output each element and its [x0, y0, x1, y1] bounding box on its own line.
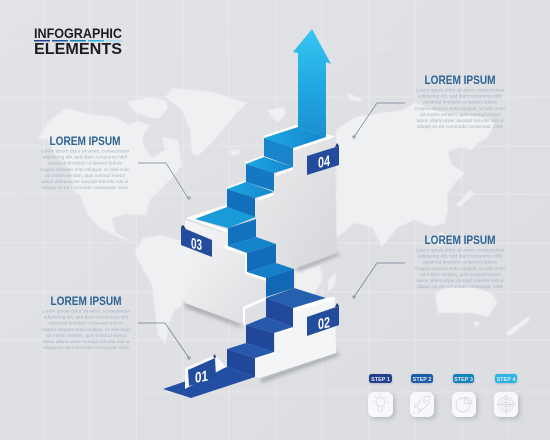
label 04 — [307, 143, 339, 175]
title — [34, 25, 122, 58]
label 01: 01 — [195, 368, 208, 387]
icon card: target — [494, 392, 518, 417]
arrow — [293, 29, 331, 137]
label 03: 03 — [191, 235, 202, 254]
label 03 — [181, 225, 212, 257]
text block: middle right — [415, 235, 505, 290]
staircase — [163, 29, 341, 398]
icon card: pie chart — [452, 392, 476, 417]
icon card: light bulb — [368, 392, 393, 417]
text block: bottom left: LOREM IPSUM — [50, 296, 122, 308]
text block: top left: ad minim veniam, quis nostrud exerci — [45, 173, 125, 179]
label 01 — [188, 354, 216, 387]
text block: bottom left: adipiscing elit, sed diam nonummy nibh — [44, 315, 129, 321]
step 1 pill: STEP 1 — [371, 377, 390, 383]
text block: bottom left — [41, 296, 131, 351]
text block: middle right: magna aliquam erat volutpat. Ut wisi enim — [415, 266, 505, 272]
text block: bottom left: tation ullamcorper suscipit lobortis nisl ut — [43, 339, 130, 345]
title: INFOGRAPHIC — [34, 25, 122, 41]
lower stairs — [266, 288, 326, 308]
leader line: bottom left — [138, 323, 190, 359]
text block: top left: LOREM IPSUM — [50, 136, 120, 148]
text block: bottom left: magna aliquam erat volutpat. Ut wisi enim — [41, 327, 131, 333]
label 04: 04 — [318, 153, 330, 172]
text block: top left: euismod tincidunt ut laoreet dolore — [48, 161, 122, 167]
text block: bottom left: Lorem ipsum dolor sit amet, consectetuer — [42, 308, 131, 314]
text block: top right: LOREM IPSUM — [424, 75, 496, 87]
text block: middle right: euismod tincidunt ut laoreet dolore — [423, 260, 497, 266]
step 2 pill — [411, 374, 433, 383]
text block: bottom left: ad minim veniam, quis nostrud exerci — [46, 333, 126, 339]
step 3 pill — [453, 374, 474, 383]
text block: top left — [40, 136, 130, 191]
step 1 pill — [369, 374, 392, 383]
text block: top right: adipiscing elit, sed diam nonummy nibh — [418, 94, 503, 100]
text block: middle right: Lorem ipsum dolor sit amet, consectetuer — [416, 248, 505, 254]
floor ribbon — [163, 367, 255, 398]
white base under step 01 — [185, 355, 226, 389]
text block: top right: magna aliquam erat volutpat. Ut wisi enim — [415, 106, 505, 112]
text block: middle right: ad minim veniam, quis nostrud exerci — [420, 272, 500, 278]
text block: top right — [415, 75, 505, 130]
text block: top right: Lorem ipsum dolor sit amet, consectetuer — [416, 88, 505, 94]
text block: top left: tation ullamcorper suscipit lobortis nisl ut — [42, 179, 129, 185]
upper stairs — [264, 127, 326, 148]
left block 03 — [185, 220, 266, 323]
step 2 pill: STEP 2 — [413, 377, 431, 383]
upper back block — [250, 135, 337, 268]
title: ELEMENTS — [34, 41, 122, 58]
text block: middle right: adipiscing elit, sed diam nonummy nibh — [418, 254, 503, 260]
text block: bottom left: euismod tincidunt ut laoreet dolore — [49, 321, 123, 327]
text block: top right: ad minim veniam, quis nostrud exerci — [420, 112, 500, 118]
text block: middle right: aliquip ex ea commodo consequat. Duis — [417, 284, 504, 290]
step 3 pill: STEP 3 — [454, 377, 473, 383]
icon card: rocket — [410, 392, 434, 417]
leader line: top right — [353, 103, 405, 138]
text block: top right: tation ullamcorper suscipit lobortis nisl ut — [417, 118, 504, 124]
step 4 pill — [495, 374, 517, 383]
text block: top left: adipiscing elit, sed diam nonummy nibh — [43, 155, 128, 161]
leader line: top left — [138, 163, 190, 199]
text block: top right: aliquip ex ea commodo consequat. Duis — [417, 124, 504, 130]
block shadows — [183, 252, 341, 383]
text block: top left: magna aliquam erat volutpat. Ut wisi enim — [40, 167, 130, 173]
world map — [38, 88, 530, 345]
text block: top left: aliquip ex ea commodo consequat. Duis — [42, 185, 129, 191]
text block: bottom left: aliquip ex ea commodo consequat. Duis — [43, 345, 130, 351]
label 02 — [307, 303, 339, 336]
text block: middle right: LOREM IPSUM — [424, 235, 496, 247]
step 4 pill: STEP 4 — [497, 377, 516, 383]
text block: middle right: tation ullamcorper suscipit lobortis nisl ut — [417, 278, 504, 284]
text block: top right: euismod tincidunt ut laoreet dolore — [423, 100, 497, 106]
text block: top left: Lorem ipsum dolor sit amet, consectetuer — [41, 148, 130, 154]
leader line: middle right — [353, 263, 405, 298]
lower right block 02 — [255, 297, 336, 378]
label 02: 02 — [318, 314, 330, 333]
